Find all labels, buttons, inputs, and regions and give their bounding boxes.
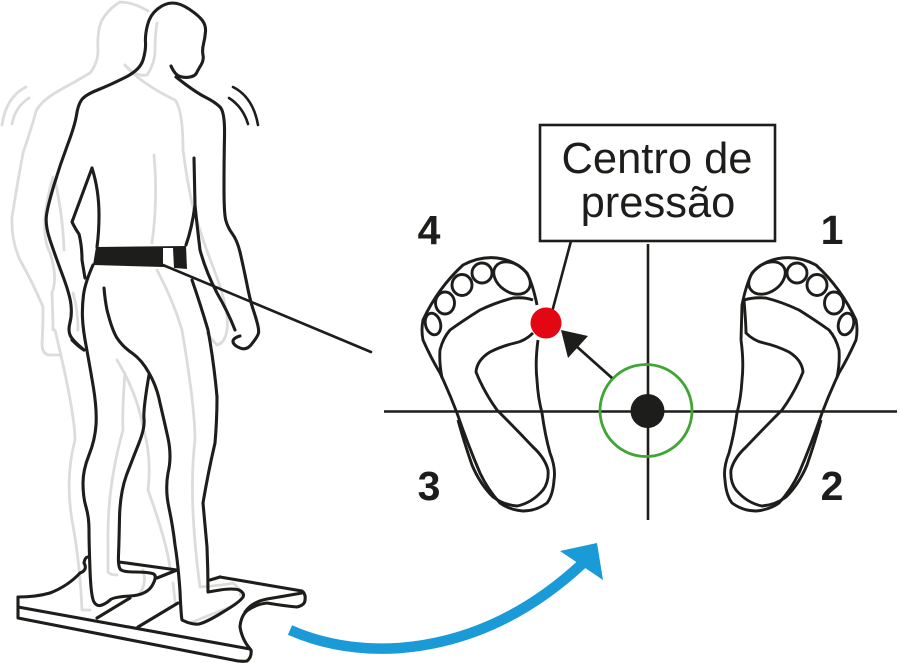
back, head and left arm outline [46,3,206,350]
quadrant number 3: 3 [418,463,440,509]
quadrant number 1: 1 [821,207,843,253]
foot outline [422,258,554,511]
right leg [104,280,244,624]
belt cable [163,265,371,352]
right foot [724,255,857,511]
quadrant number 4: 4 [418,207,441,253]
waist belt [93,246,187,269]
main figure [18,3,371,661]
label box: centro de pressão [540,125,775,241]
leader line to label [552,241,571,312]
ghost sway marks [2,87,29,125]
toes [488,255,536,301]
black centre point [630,394,664,428]
pressure diagram axes [384,244,897,520]
neck and right arm outline [176,77,259,349]
sway marks [229,87,258,125]
balance platform [18,557,305,661]
inner arm gap left [72,168,99,350]
label box: centro de pressão: Centro de [561,135,753,183]
left foot [422,255,554,511]
green reference circle [600,364,692,456]
displacement arrow [561,330,612,378]
label box: centro de pressão: pressão [581,179,735,227]
quadrant number 2: 2 [821,463,843,509]
ghost figure: swaying position [2,2,240,623]
forefoot and arch line [440,298,548,506]
left leg [82,265,155,606]
blue curved arrow [290,543,603,649]
red centre of pressure point [530,308,562,338]
inner arm gap right [186,158,235,330]
